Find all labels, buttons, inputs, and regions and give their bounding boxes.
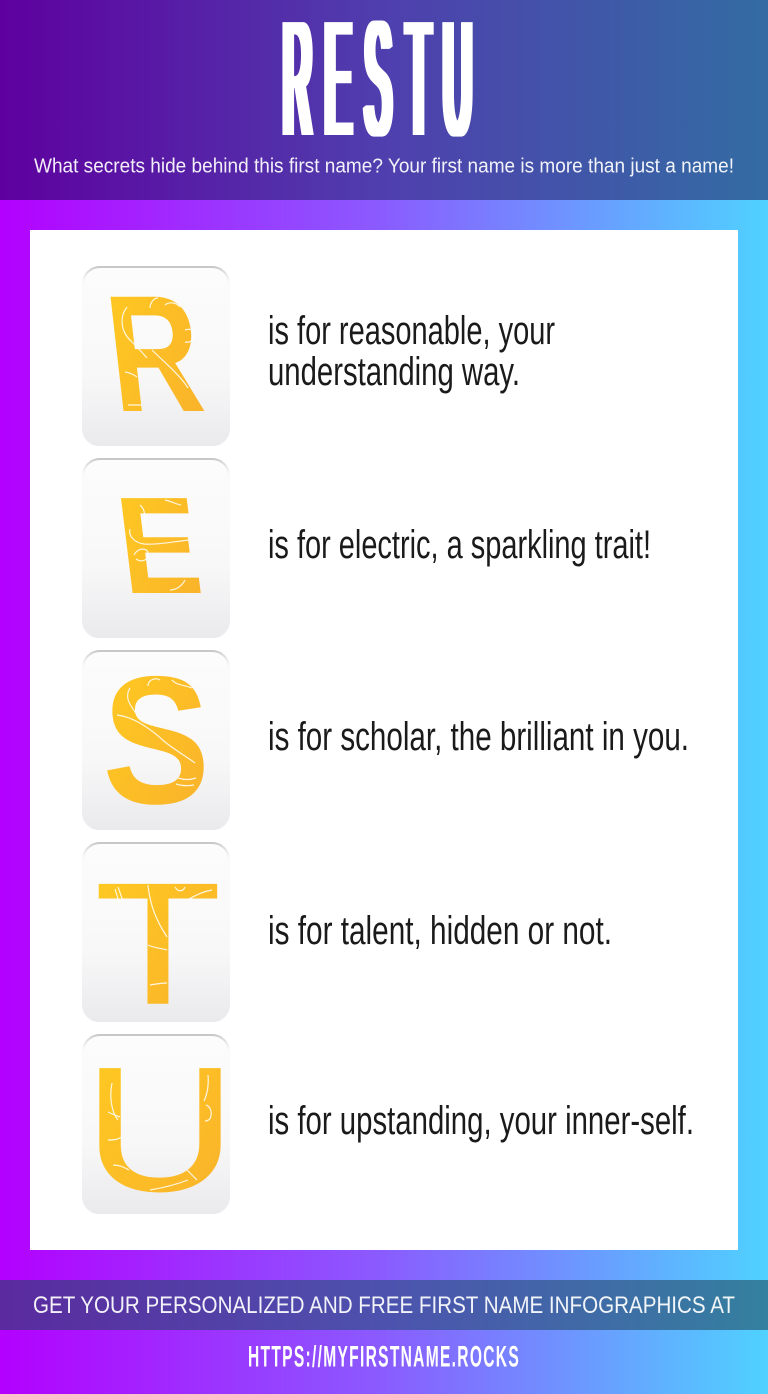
header band <box>0 0 768 200</box>
footer band <box>0 1280 768 1330</box>
icon: letter U tile: U <box>84 1032 236 1228</box>
footer url: HTTPS://MYFIRSTNAME.ROCKS <box>248 1340 520 1374</box>
row: letter S <box>82 638 689 842</box>
icon: letter S tile: S <box>102 638 210 842</box>
row: letter U <box>82 1032 694 1228</box>
row: letter T <box>82 842 612 1040</box>
row: letter R <box>82 261 555 447</box>
icon: letter T tile: T <box>95 848 221 1040</box>
subtitle: What secrets hide behind this first name? Your first name is more than just a name! <box>34 154 734 178</box>
text: R meaning: is for reasonable, your <box>268 309 555 353</box>
icon: letter R tile: R <box>98 261 211 447</box>
text: R meaning line two: understanding way. <box>268 350 520 394</box>
white content panel <box>30 230 738 1250</box>
row: letter E <box>82 458 651 638</box>
icon: letter E tile: E <box>109 469 209 623</box>
text: T meaning: is for talent, hidden or not. <box>268 909 612 953</box>
icon: letter E tile <box>82 458 230 638</box>
icon: letter T tile <box>82 842 230 1040</box>
